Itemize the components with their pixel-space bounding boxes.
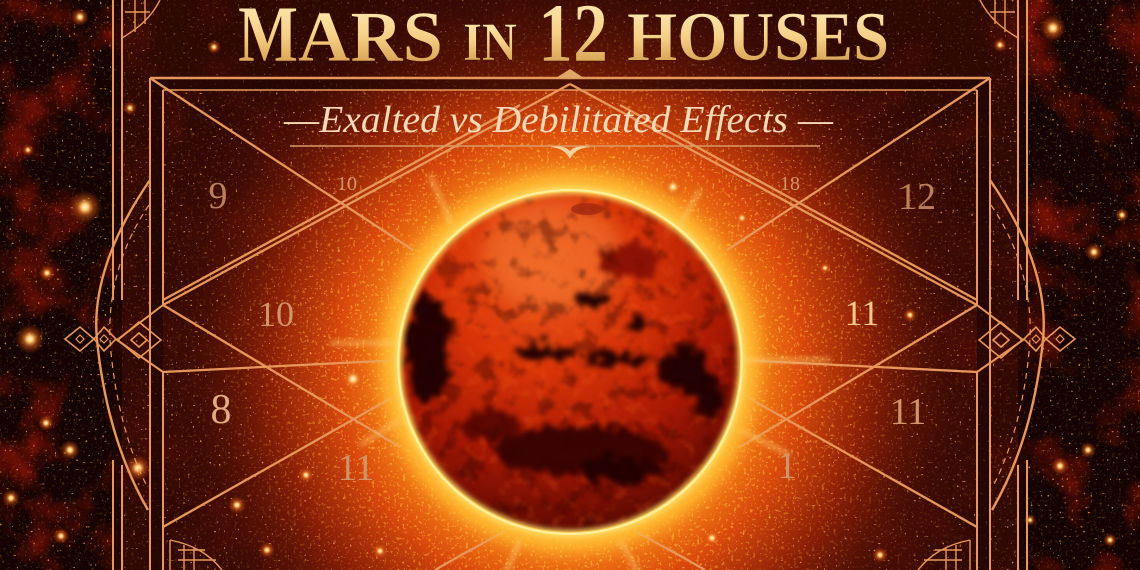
- polar spot: [571, 203, 603, 215]
- subtitle rule and ornament: [290, 146, 820, 159]
- planet rim: [398, 190, 742, 534]
- title: HOUSES: [627, 0, 889, 76]
- title: IN: [463, 12, 517, 72]
- title: [238, 0, 889, 80]
- house numbers: 11: [338, 447, 374, 489]
- house numbers: 8: [210, 387, 232, 433]
- planet glow and rays: [330, 175, 830, 570]
- house numbers: 9: [208, 175, 228, 217]
- house numbers: 1: [778, 445, 796, 487]
- top ornament triangle: [556, 69, 584, 78]
- right half of frame: [570, 0, 1075, 570]
- bright surface: [483, 200, 623, 310]
- house numbers: [208, 173, 936, 489]
- house numbers: 10: [258, 294, 294, 334]
- house numbers: 11: [845, 293, 879, 333]
- left half of frame: [65, 0, 570, 570]
- subtitle: —Exalted vs Debilitated Effects —: [283, 99, 833, 141]
- house numbers: 18: [780, 173, 800, 195]
- house numbers: 12: [898, 176, 936, 218]
- planet Mars: [399, 191, 741, 533]
- house numbers: 10: [337, 173, 357, 195]
- dark surface patches: [406, 244, 720, 484]
- house numbers: 11: [890, 391, 926, 433]
